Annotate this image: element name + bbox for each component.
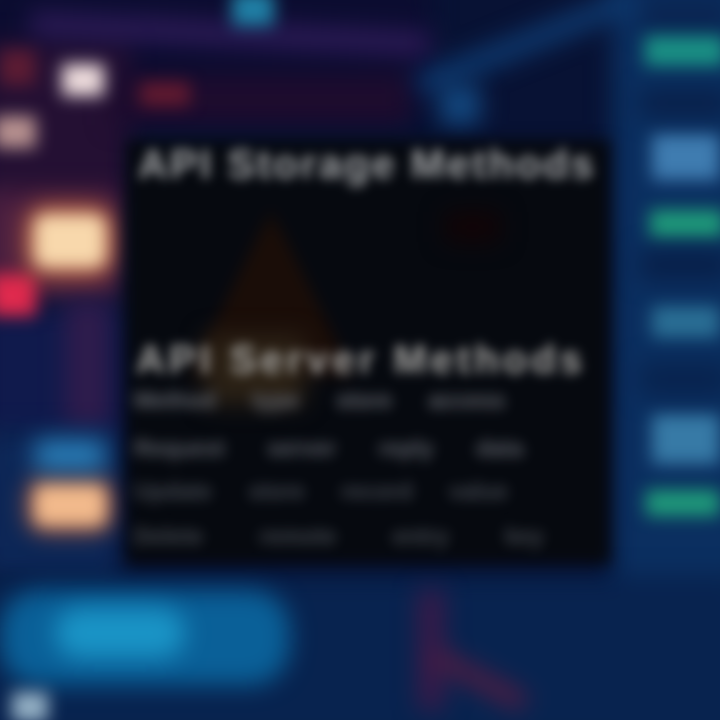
image: warm glow behind second heading <box>205 335 305 405</box>
text block: table row three: Update store record value <box>134 478 508 504</box>
text block: table row two: Request server reply data <box>134 435 523 461</box>
icon: glowing left lamp top <box>34 214 106 268</box>
chart: faint warm triangle glow <box>212 220 340 378</box>
heading: first section title: API Storage Methods <box>138 141 596 187</box>
text block: table row four: Delete remote entry key <box>134 523 544 549</box>
panel: dark content card <box>126 140 610 564</box>
heading: second section title: API Server Methods <box>136 338 586 382</box>
text block: table row one: Method type store access <box>134 387 505 413</box>
icon: blue light above lower lamp <box>35 440 105 470</box>
table: blurred method rows <box>128 386 545 550</box>
image: red tint upper right <box>445 212 500 242</box>
icon: glowing left lamp bottom <box>34 484 106 526</box>
